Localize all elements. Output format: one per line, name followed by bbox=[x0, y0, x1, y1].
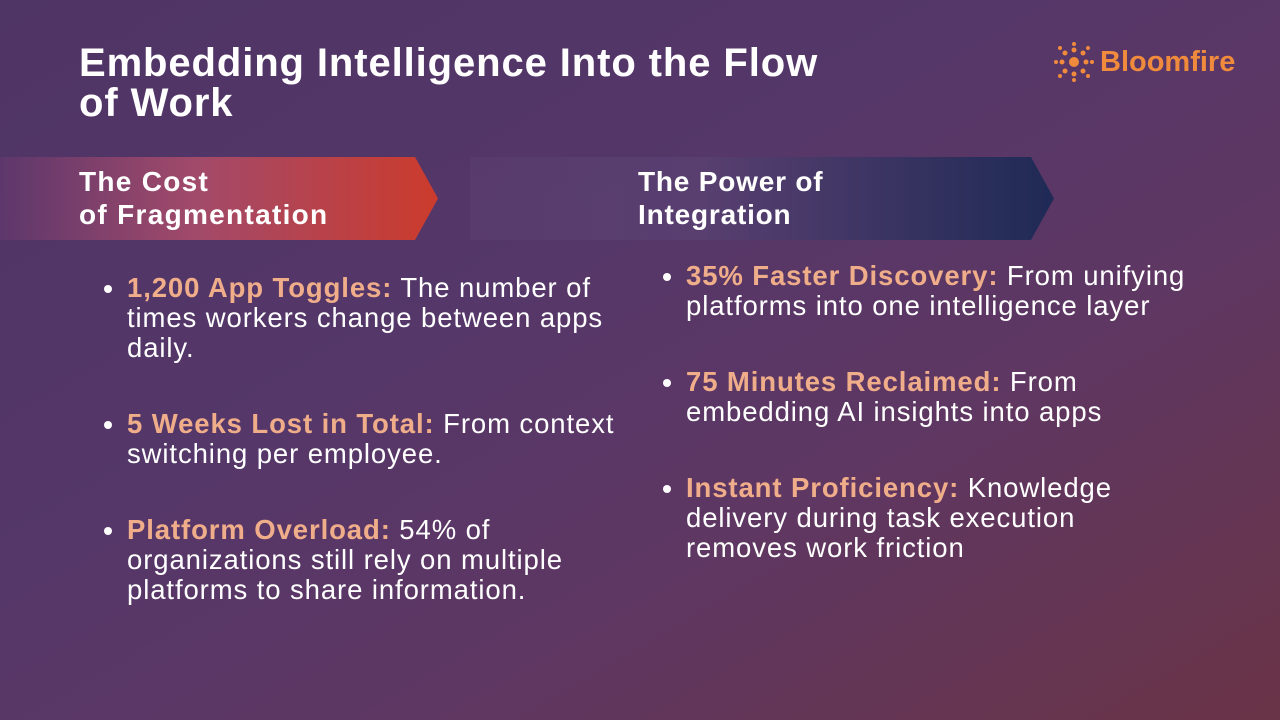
banner: power of integration bbox=[700, 157, 1054, 240]
banner heading: cost: The Cost bbox=[79, 166, 209, 197]
banner heading: power bbox=[638, 166, 823, 230]
logo: Bloomfire bbox=[1054, 42, 1235, 82]
bullet list: power: 35% Faster Discovery: From unifying platforms into one intelligence layer bbox=[686, 260, 1185, 321]
bullet list: power: removes work friction bbox=[686, 532, 965, 563]
title: Embedding Intelligence Into the Flow of Work bbox=[79, 41, 818, 125]
banner: cost of fragmentation bbox=[0, 157, 438, 240]
bullet list: cost bbox=[104, 272, 614, 605]
bullet list: cost: 5 Weeks Lost in Total: From context switching per employee. bbox=[127, 408, 614, 469]
bullet list: power bbox=[663, 260, 1185, 563]
bullet list: power: Instant Proficiency: Knowledge delivery during task execution bbox=[686, 472, 1112, 533]
banner heading: power: Integration bbox=[638, 199, 791, 230]
bullet list: cost: Platform Overload: 54% of organizations still rely on multiple platforms to share information. bbox=[127, 514, 563, 605]
logo: Bloomfire: Bloomfire bbox=[1100, 46, 1235, 78]
bullet list: power: 75 Minutes Reclaimed: From embedding AI insights into apps bbox=[686, 366, 1102, 427]
banner heading: power: The Power of bbox=[638, 166, 823, 197]
banner heading: cost: of Fragmentation bbox=[79, 199, 328, 230]
banner heading: cost bbox=[79, 166, 328, 230]
bullet list: cost: 1,200 App Toggles: The number of times workers change between apps daily. bbox=[127, 272, 603, 363]
